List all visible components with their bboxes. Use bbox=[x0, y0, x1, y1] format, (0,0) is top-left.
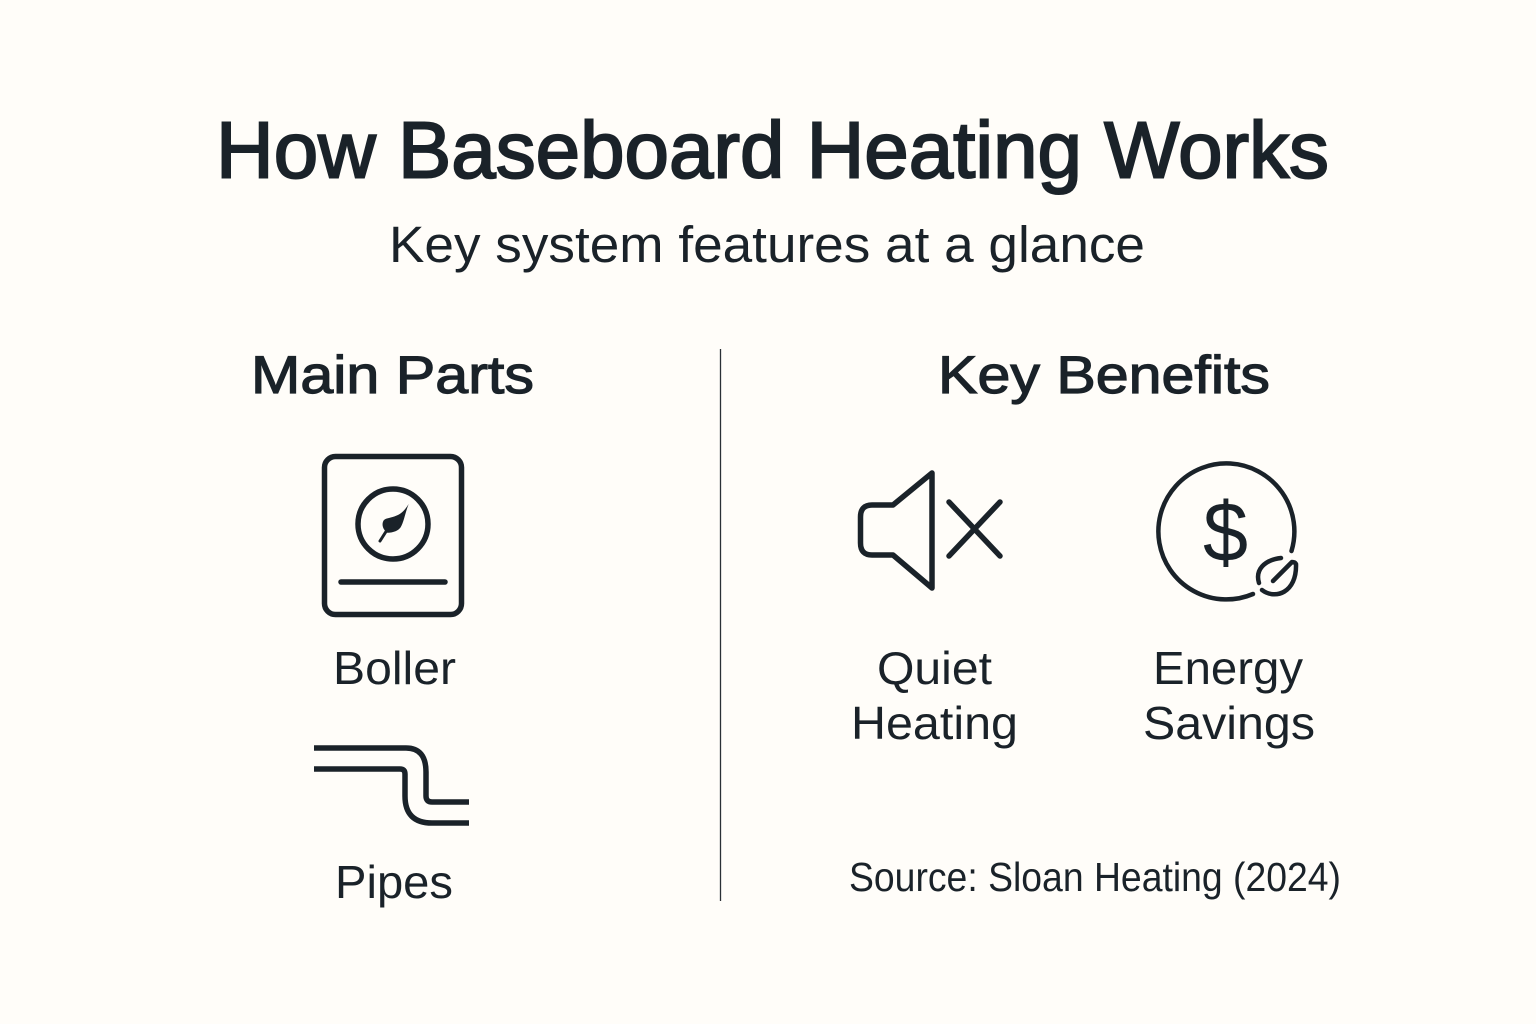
label: boiler: Boller bbox=[333, 642, 456, 694]
icon: energy savings: $ bbox=[1203, 485, 1248, 579]
label: pipes: Pipes bbox=[335, 856, 453, 908]
icon: energy savings bbox=[1158, 463, 1296, 599]
label: energy savings bbox=[1143, 642, 1315, 749]
icon: boiler bbox=[324, 456, 462, 614]
label: quiet heating: Heating bbox=[851, 697, 1018, 749]
icon: pipes bbox=[314, 748, 469, 823]
title: How Baseboard Heating Works bbox=[216, 106, 1329, 194]
panel: key benefits bbox=[849, 346, 1341, 900]
label: energy savings: Energy bbox=[1153, 642, 1303, 694]
label: quiet heating bbox=[851, 642, 1018, 749]
panel: main parts bbox=[251, 346, 534, 908]
heading: key benefits: Key Benefits bbox=[938, 346, 1270, 405]
heading: main parts: Main Parts bbox=[251, 346, 534, 405]
label: energy savings: Savings bbox=[1143, 697, 1315, 749]
icon: quiet speaker bbox=[860, 473, 1000, 588]
subtitle: Key system features at a glance bbox=[389, 216, 1145, 273]
label: quiet heating: Quiet bbox=[877, 642, 992, 694]
source note: Source: Sloan Heating (2024) bbox=[849, 854, 1341, 900]
